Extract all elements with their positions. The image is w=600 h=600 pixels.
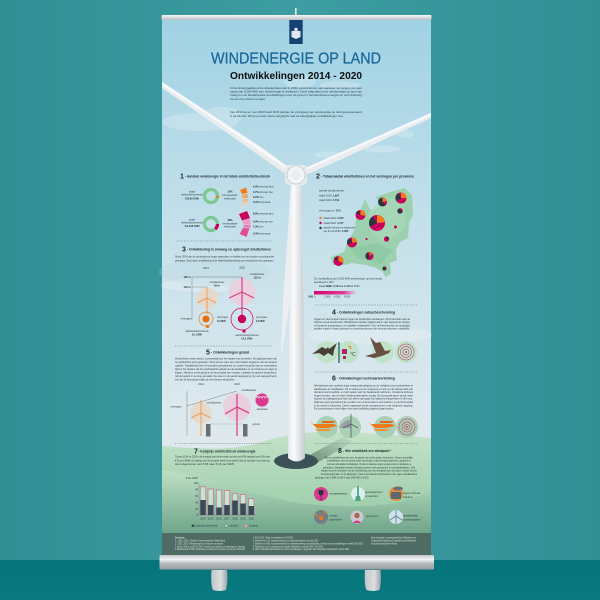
floor bbox=[0, 560, 600, 600]
legend power bbox=[319, 208, 360, 233]
heading 4: 4 bbox=[332, 310, 336, 316]
heading 1: 1 bbox=[180, 174, 184, 180]
power 2014 bbox=[199, 312, 213, 328]
legend power: aandeel binnen in windverkeling bbox=[324, 226, 360, 230]
power labels bbox=[185, 316, 268, 340]
map: Netherlands bbox=[331, 188, 413, 277]
tower bbox=[288, 185, 305, 462]
rotor labels: rotordiameter bbox=[250, 273, 265, 276]
icon: plane 1 bbox=[310, 416, 338, 438]
paragraph 8: burgers kunnen meedoen met de ontwikkeling van een windpark door zich aan te sluiten bij een bbox=[321, 469, 417, 473]
sky bbox=[162, 19, 431, 534]
intro text: totaal van 6.000 MW aan windenergie te realiseren. Deze afspraken over windenergie op land zijn bbox=[230, 90, 362, 94]
progress bar: 4.000 bbox=[334, 295, 341, 298]
stand pole bbox=[295, 8, 297, 16]
bar chart: 2015 bbox=[208, 518, 214, 520]
paragraph 4: Vogels en vleermuizen kunnen tegen de windturbine aanvliegen. Dit onderzoek naar de bbox=[314, 317, 410, 321]
power 2020 bbox=[231, 308, 253, 332]
turbine 2014 orange bbox=[196, 287, 218, 314]
paragraph 6: ingezet op radargestuurd licht, die alleen aan gaan bij naderend vliegverkeer in de buurt. bbox=[314, 397, 413, 401]
power labels: elektriciteitsproductie bbox=[235, 334, 259, 337]
label 2020 total: elektriciteitsverbruik bbox=[181, 222, 204, 224]
icon: local government bbox=[389, 486, 403, 501]
values 2020 bbox=[253, 212, 274, 236]
subtitle: Ontwikkelingen 2014 - 2020 bbox=[230, 70, 362, 82]
label local government bbox=[403, 492, 421, 499]
footer band bbox=[162, 533, 431, 556]
footer sources column 1: 3. Monitor Wind op Land 2020, RVO: overzicht van projecten en vergunningen in uitvoering bbox=[175, 544, 245, 548]
heading 6: 6 bbox=[332, 376, 336, 382]
axis heights bbox=[192, 277, 242, 320]
icon: turbine cloud bbox=[339, 414, 361, 438]
heading 7 bbox=[194, 448, 256, 456]
height labels: 2014 bbox=[203, 267, 209, 270]
label developers: ontwikkelings bbox=[403, 514, 419, 518]
progress text bbox=[314, 276, 382, 284]
progress bar: doel 2020 bbox=[349, 285, 360, 288]
progress bar: 6.000 bbox=[344, 295, 351, 298]
heading 1 bbox=[180, 174, 270, 180]
icon: bat bbox=[312, 341, 338, 363]
paragraph 5: tijdens het draaien als het mechanische geluid van de windturbine te verminderen en lager te bbox=[175, 367, 277, 371]
intro text: In het Energieakkoord is afgesproken dat in 2020 provincies én een aandeel vervangen om een bbox=[230, 86, 362, 90]
paragraph 8: Bij de ontwikkeling van een windpark zijn veel partijen betrokken. Naast ruimtelijke bbox=[325, 455, 413, 459]
legend power: totaal 2020: 4.177 bbox=[324, 222, 344, 225]
labels: vakoaraat bbox=[257, 408, 268, 411]
footer sources column 1: 1. CBS, 2021: StatLine hernieuwbare elektriciteit bbox=[175, 538, 225, 542]
power labels: 14,3 GWh bbox=[241, 338, 253, 340]
footer sources column 1: Bronnen: bbox=[175, 536, 185, 540]
height labels bbox=[183, 266, 245, 289]
paragraph 7: Tussen 2014 en 2020 is de kostprijs van windenergie op land met 40% gedaald van € 89 naar bbox=[175, 454, 270, 458]
year labels: 2014 bbox=[198, 383, 204, 386]
bar chart: 20 bbox=[195, 508, 199, 511]
label local government: lagere overheid bbox=[403, 492, 421, 495]
height labels: 2020 bbox=[239, 266, 245, 270]
paragraph 6: Daarmee wordt geprobeerd de overlast voor omwonenden te verminderen, en de lichtoverlast bbox=[314, 400, 413, 404]
bottom cassette bbox=[160, 555, 434, 570]
icon: target maze bbox=[395, 341, 417, 363]
values 2014 bbox=[253, 186, 274, 204]
intro text: Van 2014 tot en met 2020 heeft RVO partijen de voortgang van windenergie op land gepresenteerd bbox=[230, 110, 362, 114]
legend power: vermogen in MW: bbox=[319, 208, 342, 212]
heading 3: - Ontwikkeling in omvang en opbrengst windturbines bbox=[187, 248, 271, 252]
blade: right bbox=[305, 113, 431, 174]
paragraph 6 bbox=[314, 384, 413, 410]
vermogen label: vermogen bbox=[180, 318, 192, 320]
icon: municipality person bbox=[350, 510, 364, 524]
power labels: 8,1 GWh bbox=[192, 334, 202, 336]
paragraph 8: gebruiken. Daarnaast werken bedrijven samen met gemeenten en energiebedrijven. Ook bbox=[323, 465, 415, 469]
legend counts: totaal 2020: 2.719 bbox=[319, 199, 340, 202]
footer sources column 1: 4. Rijkswaterstaat en RVO: ontwikkeling van turbines en kenmerken over de jaren 2014-2020 bbox=[175, 547, 245, 551]
paragraph 6: waarborgen te ontwikkelen. Dit is nodig voor de omgeving en ook om de scheepvaart van bbox=[314, 387, 413, 391]
footer sources column 2 bbox=[253, 536, 363, 551]
heading 5: - Ontwikkelingen geluid bbox=[211, 350, 249, 354]
footer sources column 2: 5. RIVM, 2021: Geluid van windturbines, 2014-2020 bbox=[253, 536, 293, 540]
label municipalities: gemeenten bbox=[366, 515, 379, 518]
paragraph 3 bbox=[175, 254, 274, 262]
label 2020 total: totaal bbox=[189, 218, 195, 221]
label 2014 total: elektriciteitsverbruik bbox=[181, 194, 204, 197]
paragraph 8: ontwikkelaars zien we steeds vaker dat partijen zoals energiecoöperaties, agrariërs en bbox=[327, 459, 411, 463]
values 2014: 0,7% wind op zee bbox=[253, 191, 273, 194]
intro text: van de CO₂-uitstoot te halen. bbox=[230, 97, 266, 101]
label 28%: 28% bbox=[227, 219, 233, 222]
power labels: 5,6 MW bbox=[256, 320, 265, 323]
values 2014: 5,0% biomassa bbox=[253, 201, 271, 204]
paragraph 5: rotaties. Tegelijkertijd zijn er innovaties gerealiseerd om zowel het geluid van de windturbine bbox=[175, 364, 277, 368]
heading 4: - Ontwikkelingen natuurbescherming bbox=[337, 310, 395, 314]
footer colophon: Ondernemend Nederland in opdracht van het Ministerie bbox=[371, 538, 416, 542]
paragraph 7 bbox=[175, 454, 270, 466]
chart legend: subsidie bbox=[229, 525, 239, 528]
foot left bbox=[211, 570, 227, 591]
paragraph 5: met dan de kans geluid maakt dan een kleinere windturbine. bbox=[175, 378, 235, 382]
footer colophon: Deze infographic is samengesteld door Rijksdienst voor bbox=[371, 536, 416, 540]
panel: 5 geluid bbox=[170, 350, 277, 436]
label energy companies: energiebedrijven bbox=[329, 492, 348, 496]
panel: 6 luchtvaartverlichting bbox=[310, 376, 418, 438]
paragraph 4: effecten wordt steeds beter. Windturbines worden stilgezet als er veel vleermuizen vliegen bbox=[314, 320, 410, 324]
label local government: bedrijven bbox=[403, 496, 414, 499]
label developers: maatschappijen bbox=[403, 518, 421, 521]
paragraph 6: De komende jaren moet blijken hoe deze verlichting uitgerold gaat worden. bbox=[314, 406, 394, 410]
label developers bbox=[403, 514, 421, 521]
foot right bbox=[365, 570, 381, 591]
wind turbine bbox=[162, 82, 431, 469]
panel: 4 natuurbescherming bbox=[312, 310, 417, 363]
intro text bbox=[230, 86, 362, 118]
paragraph 6: dat deze wordt verlicht, en het houden van het Nederlands luchtruim. Omdat de turbines bbox=[314, 390, 413, 394]
progress text: gerealiseerd in 2023. bbox=[314, 280, 334, 284]
heading 5 bbox=[206, 350, 249, 356]
chart axis bbox=[187, 391, 237, 436]
heading 3: 3 bbox=[182, 246, 186, 254]
values 2014: 4,0% wind op land bbox=[253, 186, 274, 188]
heading 7: - Kostprijs elektriciteit uit windenergie bbox=[198, 450, 256, 454]
legend power: per 31-12-2020: 2.285 bbox=[324, 230, 349, 233]
paragraph 3: Sinds 2014 zijn de windturbines hoger geworden en hebben ze een grotere rotordiameter bbox=[175, 254, 274, 258]
progress bar: totaal 2018 bbox=[337, 285, 350, 288]
panel: 1 aandeel windenergie bbox=[180, 174, 274, 237]
panel: 2 turbines per provincie bbox=[308, 174, 414, 298]
icon: eagle bbox=[365, 337, 394, 363]
chart legend bbox=[192, 524, 259, 528]
paragraph 4: worden vogels in kaart gebracht en detectiesystemen die turbines stilzetten ontwikkeld. bbox=[314, 327, 410, 331]
legend counts bbox=[319, 188, 345, 202]
heading 6: - Ontwikkelingen luchtvaartverlichting bbox=[337, 376, 395, 380]
legend counts: aantal windturbines: bbox=[319, 188, 345, 192]
logo: Rijksoverheid bbox=[289, 20, 303, 44]
hub bbox=[287, 166, 305, 184]
rotor labels bbox=[210, 273, 265, 287]
progress text: De doelstelling van 6.000 MW windenergie op land wordt bbox=[314, 276, 382, 280]
legend counts: totaal 2014: 1.954 bbox=[319, 194, 340, 198]
label cooperatives bbox=[329, 514, 343, 521]
values 2020: 3,4% biomassa bbox=[253, 232, 271, 236]
label 2014 total: 109,09 GWh bbox=[185, 197, 200, 200]
bar chart: 0 bbox=[197, 514, 199, 517]
label 10%: 10% bbox=[227, 190, 233, 194]
heading 4 bbox=[332, 310, 395, 316]
footer sources column 2: 8. Planbureau voor de Leefomgeving: kostprijs elektriciteit en subsidie SDE+ 2014-2020 bbox=[253, 544, 323, 548]
paragraph 5: Windturbines maken geluid, voornamelijk door het draaien van de wieken. De afgelopen jaren zijn bbox=[175, 356, 277, 360]
label 10%: elektriciteit bbox=[224, 197, 236, 200]
progress bar bbox=[308, 285, 360, 298]
values 2014: 0,2% zon bbox=[253, 196, 264, 199]
bar chart bbox=[186, 477, 256, 520]
paragraph 5: krijgen. Hierdoor is het geluid in de buurt gelijk aan vroeger, ondanks de grotere windturbine, bbox=[175, 370, 277, 374]
labels: vermogen bbox=[170, 406, 182, 408]
hill: front bbox=[162, 470, 431, 534]
turbine 2020 magenta bbox=[228, 277, 256, 316]
label 28% bbox=[222, 219, 238, 229]
panel: 8 wie ontwikkelt bbox=[314, 448, 421, 524]
top bar bbox=[162, 15, 432, 20]
icon: developers turbine bbox=[389, 510, 403, 524]
power labels: vermogen bbox=[217, 316, 229, 319]
heading 2 bbox=[316, 174, 414, 180]
icon: cooperatives bbox=[314, 510, 328, 524]
power labels: 3,0 MW bbox=[217, 320, 226, 323]
chart legend: kostprijs elektriciteit bbox=[196, 525, 217, 528]
icon: thermometer: °C bbox=[350, 352, 356, 358]
year labels: 2020 bbox=[234, 383, 240, 386]
power labels: elektriciteitsproductie bbox=[185, 330, 209, 333]
label land owners: en agrariërs bbox=[365, 495, 379, 498]
power labels: vermogen bbox=[256, 316, 268, 319]
nacelle bbox=[285, 165, 307, 185]
heading 8: - Wie ontwikkelt een windpark? bbox=[343, 449, 391, 453]
label 2014 total: totaal bbox=[189, 190, 195, 194]
paragraph 5: de windturbines groter geworden. Deze kunnen meer wel, maar draaien langzamer met dus kleinere bbox=[175, 360, 277, 364]
tower base bbox=[274, 453, 318, 469]
values 2020: 6,9% wind op zee bbox=[253, 220, 273, 224]
donut 2020 bbox=[204, 218, 218, 230]
height labels: 185 m bbox=[183, 276, 191, 279]
paragraph 4: en bij warme temperaturen, en mogelijke maatregelen. Voor de bescherming van roofvogels bbox=[314, 323, 410, 327]
label land owners: grondeigenaren bbox=[365, 491, 383, 494]
label 2020 total: 111,228 GWh bbox=[184, 225, 200, 228]
icon: land owners bbox=[351, 486, 365, 501]
paragraph 5: minder geluid in de loop gemaakt. De eisen in de geluid regelgeving zijn ook aangescherpt, bbox=[175, 374, 277, 378]
heading 1: - Aandeel windenergie in het totale elektriciteitsverbruik bbox=[185, 174, 270, 178]
label 28%: elektriciteit bbox=[224, 226, 236, 229]
clouds bbox=[161, 76, 432, 344]
legend power: totaal 2014: 2.670 bbox=[324, 217, 344, 220]
progress bar: MW bbox=[308, 295, 314, 298]
heading 3 bbox=[182, 246, 271, 254]
fan magenta bbox=[239, 211, 251, 237]
blade: lower bbox=[281, 182, 297, 357]
paragraph 8 bbox=[315, 455, 417, 480]
chart legend: kostprijs bbox=[249, 525, 259, 528]
bar chart: 2016 bbox=[216, 518, 222, 520]
bar chart: 2017 bbox=[224, 518, 230, 520]
label land owners bbox=[365, 491, 383, 498]
rotor labels: 92 m bbox=[214, 284, 221, 287]
tower shadow on ground bbox=[304, 436, 352, 466]
labels: geluid bbox=[253, 423, 260, 426]
labels: rotordiameter bbox=[242, 389, 257, 392]
label 2014 total bbox=[181, 190, 204, 200]
bar chart: 60 bbox=[195, 495, 199, 498]
serration ball bbox=[255, 393, 269, 407]
heading 8: 8 bbox=[338, 448, 342, 455]
sky haze band bbox=[159, 258, 271, 286]
values 2020: 7,3% zon bbox=[253, 226, 264, 228]
paragraph 7: land afgenomen van € 65 naar € 23 per MWh. bbox=[175, 462, 235, 466]
paragraph 7: € 52 per MWh. De daling van de kostprijs heeft ertoe geleid dat de subsidie voor wind op bbox=[175, 458, 270, 462]
progress bar: totaal 2014 bbox=[319, 285, 332, 288]
heading 8 bbox=[338, 448, 391, 455]
icon: target bbox=[396, 416, 418, 438]
progress bar: 2.000 bbox=[324, 295, 331, 298]
blade: left bbox=[162, 82, 288, 173]
height labels: 149 m bbox=[183, 286, 191, 289]
turbine 2014 bbox=[190, 400, 212, 436]
paragraph 8: energiecoöperatie. In de afgelopen 7 jaar is het aantal windprojecten van eigen ontwikkelaars bbox=[321, 472, 417, 476]
label cooperatives: coöperaties bbox=[329, 518, 343, 521]
icon: plane 2 bbox=[368, 416, 396, 438]
hill: back bbox=[162, 431, 431, 534]
heading 7: 7 bbox=[194, 448, 198, 456]
map pies bbox=[334, 192, 406, 270]
bar chart: € per MWh bbox=[186, 477, 199, 480]
panel: 7 kostprijs bbox=[175, 448, 270, 528]
sound bars bbox=[206, 424, 248, 436]
progress bar: totaal 2015 bbox=[326, 285, 339, 288]
paragraph 8: inwoners windparken ontwikkelen. Omdat ze daarmee eigen energie kunnen opwekken en bbox=[327, 462, 411, 466]
turbine 2020 bbox=[223, 393, 251, 436]
footer sources column 1 bbox=[175, 536, 245, 551]
heading 2: - Totaal aantal windturbines en het vermogen per provincie bbox=[321, 174, 414, 178]
paragraph 3: gekregen. Door deze ontwikkeling is de elektriciteitsproductie per windturbine fors gestegen. bbox=[175, 258, 274, 262]
footer sources column 2: 6. Ministerie van LNV: natuurbescherming en vogels bij windparken op land, 2020 bbox=[253, 538, 318, 542]
heading 6 bbox=[332, 376, 395, 382]
bar chart: 40 bbox=[195, 502, 199, 504]
intro text: in de Monitor Wind op Land. Deze infographic laat de belangrijkste ontwikkelingen zien. bbox=[230, 114, 344, 118]
banner poster bbox=[159, 19, 432, 556]
footer colophon bbox=[371, 536, 416, 545]
bar chart: 2019 bbox=[240, 518, 246, 520]
label 2020 total bbox=[181, 218, 204, 228]
progress bar: 0 bbox=[314, 295, 316, 298]
paragraph 5 bbox=[175, 356, 277, 382]
label 10% bbox=[222, 190, 238, 200]
paragraph 8: gestegen van 1 MW in 2014 naar 195 MW in 2020. bbox=[315, 476, 369, 480]
icon: energy companies bbox=[314, 487, 328, 501]
donut 2014 bbox=[204, 190, 218, 202]
intro text: nodig om de Nederlandse doelstellingen voor de groei in hernieuwbare energie en vermindering bbox=[230, 93, 362, 97]
footer sources column 2: 7. Ministerie van BZK: luchtvaartverlichting en obstakelmarkering van windturbines, overzicht van de ontwikkelingen en beleid 2014-2020 bbox=[253, 541, 363, 545]
label 10%: hernieuwbare bbox=[222, 194, 238, 197]
bar chart: 2020 bbox=[249, 518, 255, 520]
footer sources column 2: 9. RVO: Participatie bij windparken op land, ontwikkelaars en eigenaren van windparken in Nederland, monitor 2020 bbox=[253, 547, 349, 551]
labels: rotordiameter bbox=[207, 402, 222, 404]
footer colophon: van Economische Zaken en Klimaat bbox=[371, 541, 397, 545]
values 2020: 8,6% wind op land bbox=[253, 212, 274, 216]
bar chart: 2018 bbox=[232, 518, 238, 520]
heading 2: 2 bbox=[316, 174, 320, 180]
title: WINDENERGIE OP LAND bbox=[211, 50, 381, 67]
bar chart: 80 bbox=[195, 488, 199, 492]
paragraph 6: Windturbines zijn verplicht hoge transportbeveiliging om de veiligheid voor luchtverkeer te bbox=[314, 384, 413, 388]
heading 5: 5 bbox=[206, 350, 210, 356]
labels bbox=[170, 389, 268, 426]
paragraph 6: in de nacht te beperken. Deze maatregel wordt meegenomen in de volgende regeling. bbox=[314, 403, 413, 407]
fan orange bbox=[240, 188, 248, 206]
label cooperatives: energie bbox=[329, 514, 338, 518]
label 28%: hernieuwbare bbox=[222, 222, 238, 225]
bar chart: 100 bbox=[194, 482, 199, 485]
paragraph 4 bbox=[314, 317, 410, 331]
year labels bbox=[198, 383, 240, 386]
rotor labels: 123 m bbox=[253, 276, 261, 279]
panel: 3 omvang en opbrengst bbox=[175, 246, 274, 340]
footer sources column 1: 2. CBS, 2021: Windenergie op land per provincie bbox=[175, 541, 223, 545]
paragraph 6: hoger worden, zijn er meer hindermaatregelen nodig. De komende jaren wordt meer bbox=[314, 393, 413, 397]
bar chart: 2014 bbox=[200, 518, 206, 520]
rotor labels: rotordiameter bbox=[210, 281, 225, 284]
